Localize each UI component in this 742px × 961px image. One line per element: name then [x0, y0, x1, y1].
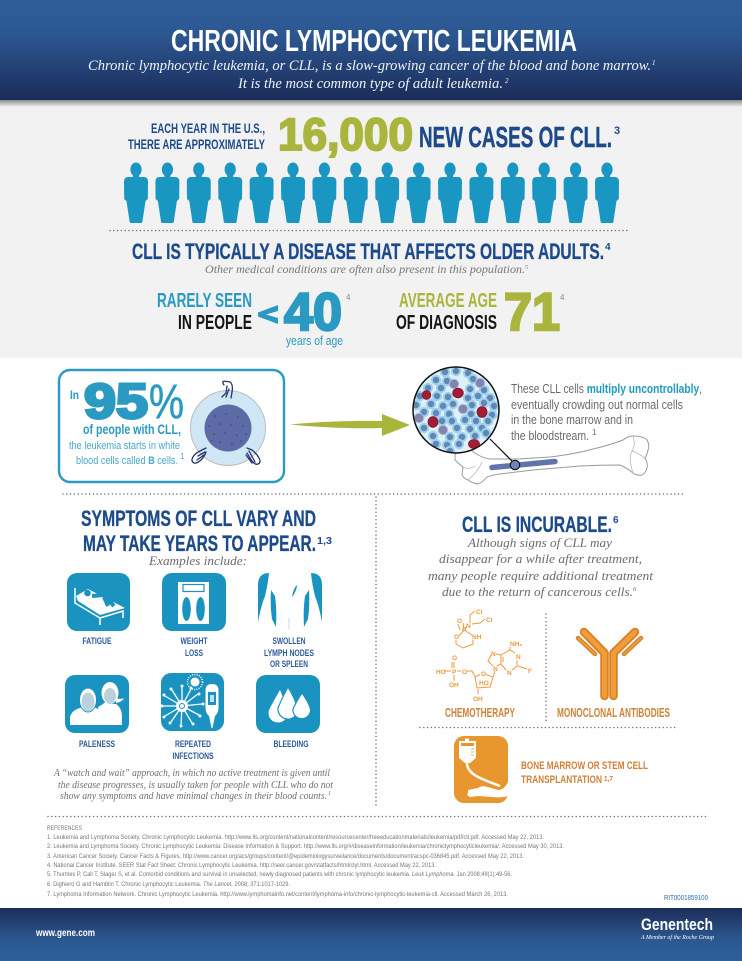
header shadow: [0, 100, 742, 107]
icon: chemotherapy molecule: OH: [449, 682, 459, 689]
icon: chemotherapy molecule: O: [462, 669, 467, 676]
less-than sign: [258, 305, 278, 324]
icon: bone with magnified marrow: [412, 367, 649, 484]
label: chemotherapy: CHEMOTHERAPY: [445, 706, 515, 720]
new cases text: NEW CASES OF CLL.: [419, 122, 612, 154]
row of 16 people icons: [124, 162, 619, 223]
text: watch and wait: [53, 767, 334, 802]
label: swollen lymph nodes or spleen: OR SPLEEN: [270, 659, 308, 670]
text: multiply uncontrollably: 1: [592, 428, 597, 437]
heading: symptoms: [81, 506, 332, 568]
subtitle: 2: [505, 77, 509, 85]
label: bleeding: BLEEDING: [274, 739, 308, 750]
text: multiply uncontrollably: eventually crowding out normal cells: [511, 397, 683, 412]
text: multiply uncontrollably: in the bone marrow and in: [511, 412, 633, 427]
heading: symptoms: SYMPTOMS OF CLL VARY AND: [81, 506, 316, 531]
references: 1. Leukemia and Lymphoma Society. Chronic Lymphocytic Leukemia. http://www.lls.org/content/nationalcontent/resourcecenter/freeeducationmaterials/leukemia/pdf/cll.pdf. Accessed May 22, 2013.: [47, 834, 544, 841]
subtitle: Chronic lymphocytic leukemia, or CLL, is a slow-growing cancer of the blood and bone marrow.: [88, 58, 651, 74]
text: multiply uncontrollably: the bloodstream.: [511, 428, 589, 443]
icon: paleness: [65, 675, 129, 733]
icon: chemotherapy molecule: N: [493, 666, 498, 673]
label: repeated infections: REPEATED: [175, 739, 211, 750]
label: transplantation: 1,7: [604, 776, 613, 783]
subtitle: [88, 58, 656, 92]
label: paleness: PALENESS: [79, 739, 115, 750]
header banner: [0, 0, 742, 100]
percent sign: %: [149, 376, 184, 429]
text: multiply uncontrollably: [511, 381, 702, 443]
heading: symptoms: MAY TAKE YEARS TO APPEAR.: [83, 531, 316, 556]
statistic: 16,000 new cases: [128, 109, 620, 160]
icon: chemotherapy molecule: O: [452, 655, 457, 662]
heading: older adults: [132, 239, 611, 276]
icon: fatigue: [67, 573, 130, 631]
references: 4. National Cancer Institute. SEER Stat Fact Sheet: Chronic Lymphocytic Leukemia. http://seer.cancer.gov/statfacts/html/clyl.html. Accessed May 22, 2013.: [47, 862, 436, 869]
icon: chemotherapy molecule: O: [454, 634, 459, 641]
icon: repeated infections: [160, 673, 224, 731]
text: return of cancerous cells: Although signs of CLL may: [467, 535, 612, 550]
title: CHRONIC LYMPHOCYTIC LEUKEMIA: [171, 23, 577, 58]
logo: Genentech: [640, 915, 714, 941]
icon: bleeding: [256, 675, 320, 733]
intro text: [128, 121, 265, 152]
statistic: rarely seen under 40: [157, 283, 351, 348]
icon: chemotherapy molecule: N: [466, 623, 471, 630]
icon: chemotherapy molecule: F: [528, 668, 532, 675]
label: repeated infections: [172, 739, 214, 762]
panel text: of people with CLL,: [83, 421, 181, 437]
receptors: [192, 381, 260, 464]
magnifier line: [490, 439, 512, 461]
label: swollen lymph nodes or spleen: [264, 636, 314, 670]
label: repeated infections: INFECTIONS: [172, 751, 214, 762]
footer band: [0, 908, 742, 961]
icon: chemotherapy molecule: HO: [436, 669, 446, 676]
label: weight loss: [180, 636, 208, 659]
sub-heading: Other medical conditions are often also present in this population.: [205, 262, 525, 276]
icon: chemotherapy molecule: O: [481, 671, 486, 678]
text: return of cancerous cells: 6: [633, 586, 637, 593]
statistic: rarely seen under 40: 4: [346, 293, 351, 302]
references: 2. Leukemia and Lymphoma Society. Chronic Lymphocytic Leukemia: Disease Information & Support. http://www.lls.org/#/diseaseinformation/leukemia/chroniclymphocyticleukemia/. Accessed May 30, 2013.: [47, 843, 564, 850]
95: 95: [84, 375, 148, 429]
arrow: [290, 414, 410, 436]
website: www.gene.com: [35, 928, 95, 939]
label: monoclonal antibodies: MONOCLONAL ANTIBODIES: [557, 706, 670, 720]
icon: chemotherapy molecule: Cl: [486, 617, 493, 624]
panel: 95 percent B cells: [59, 370, 284, 482]
label: transplantation: BONE MARROW OR STEM CELL: [521, 760, 648, 772]
text: watch and wait: show any symptoms and have minimal changes in their blood counts.: [60, 790, 327, 802]
icon: swollen lymph nodes or spleen: [258, 573, 322, 629]
text: return of cancerous cells: disappear for a while after treatment,: [439, 551, 642, 566]
statistic: average age 71: [396, 283, 565, 342]
heading: CLL is incurable: 6: [613, 515, 619, 526]
references: REFERENCES: [47, 825, 82, 832]
label: transplantation: TRANSPLANTATION: [521, 774, 602, 786]
document code: RIT0001859100: [664, 895, 708, 902]
text: return of cancerous cells: many people require additional treatment: [428, 568, 653, 583]
label: swollen lymph nodes or spleen: SWOLLEN: [272, 636, 306, 647]
heading: CLL is incurable: CLL IS INCURABLE.: [462, 512, 612, 537]
icon: chemotherapy molecule: N: [491, 651, 496, 658]
references: 7. Lymphoma Information Network. Chronic Lymphocytic Leukemia. http://www.lymphomainfo.net/content/lymphoma-info/chronic-lymphocytic-leukemia-cll. Accessed March 26, 2013.: [47, 891, 508, 898]
text: watch and wait: the disease progresses, is usually taken for people with CLL who do not: [58, 779, 334, 791]
panel: 95 percent B cells: the leukemia starts in white: [69, 440, 180, 452]
text: watch and wait: A “watch and wait” approach, in which no active treatment is given until: [53, 767, 330, 779]
logo: Genentech: A Member of the Roche Group: [640, 934, 714, 941]
icon: chemotherapy molecule: [436, 609, 532, 703]
In: In: [70, 388, 79, 402]
marrow: [492, 462, 555, 468]
statistic: 16,000 new cases: 3: [614, 125, 620, 137]
panel: 95 percent B cells: 1: [180, 452, 185, 461]
icon: chemotherapy molecule: NH: [472, 634, 482, 641]
examples include: Examples include:: [148, 553, 247, 568]
icon: monoclonal antibody: [578, 632, 641, 696]
icon: chemotherapy molecule: HO: [479, 680, 489, 687]
label: fatigue: FATIGUE: [82, 636, 112, 647]
heading: older adults: 4: [605, 242, 611, 253]
bone: [455, 436, 649, 484]
text: return of cancerous cells: due to the return of cancerous cells.: [442, 584, 633, 599]
references: 5. Thurmes P, Call T, Slager S, et al. Comorbid conditions and survival in unselected, newly diagnosed patients with chronic lymphocytic leukemia. Leuk Lymphoma. Jan 2008;49(1):49-56.: [47, 871, 512, 878]
big number 71: 71: [504, 283, 560, 342]
label: transplantation: [521, 760, 648, 786]
statistic: average age 71: AVERAGE AGE: [399, 290, 497, 312]
label: weight loss: WEIGHT: [180, 636, 208, 647]
label: swollen lymph nodes or spleen: LYMPH NODES: [264, 648, 314, 659]
subtitle: 1: [652, 59, 656, 67]
text: watch and wait: 1: [328, 791, 331, 797]
icon: chemotherapy molecule: N: [516, 654, 521, 661]
logo: Genentech: Genentech: [641, 915, 713, 934]
big number: 16,000: [278, 109, 413, 160]
icon: B cell: [190, 381, 266, 466]
heading: symptoms: 1,3: [317, 536, 332, 547]
statistic: average age 71: 4: [560, 293, 565, 302]
panel: 95 percent B cells: blood cells called B cells.: [76, 455, 178, 467]
years of age: years of age: [286, 333, 343, 348]
icon: chemotherapy molecule: P: [462, 627, 467, 634]
icon: chemotherapy molecule: Cl: [476, 609, 483, 616]
grey statistics background: [0, 100, 742, 358]
text: multiply uncontrollably: These CLL cells multiply uncontrollably,: [511, 381, 702, 396]
icon: chemotherapy molecule: NH₂: [510, 641, 522, 648]
magnified cells: [412, 367, 499, 455]
heading: older adults: 5: [525, 265, 528, 271]
references: 6. Dighiero G and Hamblin T. Chronic Lymphocytic Leukemia. The Lancet. 2008; 371:1017-1029.: [47, 881, 290, 888]
icon: chemotherapy molecule: OH: [473, 696, 483, 703]
label: weight loss: LOSS: [185, 648, 203, 659]
references: 3. American Cancer Society. Cancer Facts & Figures. http://www.cancer.org/acs/groups/content/@epidemiologysurveilance/documents/document/acspc-036845.pdf. Accessed May 22, 2013.: [47, 853, 524, 860]
references: [47, 825, 564, 898]
icon: chemotherapy molecule: N: [507, 670, 512, 677]
icon: chemotherapy molecule: O: [457, 618, 462, 625]
icon: chemotherapy molecule: P: [452, 669, 457, 676]
icon: transplantation: [454, 736, 508, 803]
icon: weight loss: [162, 573, 226, 631]
big number 40: 40: [284, 283, 342, 342]
intro text: EACH YEAR IN THE U.S.,: [151, 121, 265, 136]
intro text: THERE ARE APPROXIMATELY: [128, 137, 265, 152]
subtitle: It is the most common type of adult leukemia.: [237, 76, 503, 92]
statistic: rarely seen under 40: RARELY SEEN: [157, 290, 252, 312]
statistic: rarely seen under 40: IN PEOPLE: [178, 312, 252, 334]
text: return of cancerous cells: [428, 535, 653, 599]
statistic: average age 71: OF DIAGNOSIS: [396, 312, 497, 334]
